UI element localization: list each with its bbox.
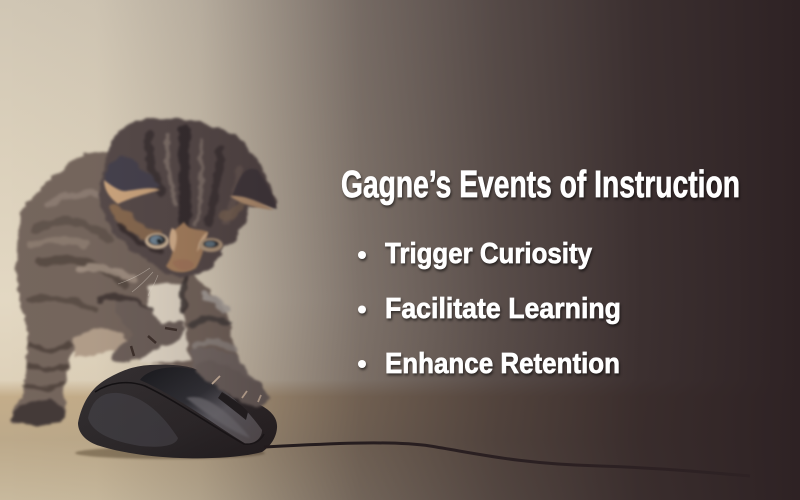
mouse textured grip	[88, 393, 178, 447]
kitten front right leg	[190, 348, 266, 405]
kitten nose	[172, 259, 194, 270]
kitten head fur stripes	[116, 130, 244, 252]
bullet item: Trigger Curiosity: Trigger Curiosity	[385, 238, 592, 270]
kitten left eye	[145, 233, 169, 249]
computer mouse	[75, 365, 277, 459]
kitten right eye	[199, 238, 223, 252]
mouse edge line	[95, 383, 264, 444]
kitten head	[100, 119, 277, 276]
kitten right ear inner	[230, 196, 274, 210]
bullet item: Facilitate Learning: Facilitate Learning	[385, 293, 621, 325]
kitten rear paw	[11, 400, 64, 425]
kitten white chest	[140, 282, 190, 362]
bullet item: Enhance Retention: Enhance Retention	[385, 348, 620, 380]
kitten whiskers	[118, 268, 158, 296]
kitten	[11, 119, 277, 425]
right paw over mouse	[194, 361, 270, 407]
kitten body	[12, 151, 266, 424]
mouse shiny highlight	[186, 397, 250, 438]
bullet list	[358, 238, 621, 380]
kitten right ear	[232, 169, 277, 209]
kitten left paw toes	[131, 328, 177, 356]
mouse glossy top button	[140, 367, 262, 444]
right paw	[194, 361, 270, 407]
photo background: carpet floor	[0, 380, 800, 500]
kitten left ear	[104, 156, 160, 202]
kitten belly tan	[72, 329, 128, 356]
kitten front left leg	[112, 300, 184, 362]
kitten face muzzle	[166, 222, 208, 272]
right paw claws	[212, 376, 261, 402]
mouse scroll wheel	[218, 392, 248, 420]
mouse shadow	[75, 447, 265, 459]
mouse cable	[264, 443, 750, 476]
kitten nose bridge	[169, 228, 208, 252]
mouse body	[78, 365, 277, 458]
kitten fur group	[11, 119, 277, 425]
kitten body markings	[26, 193, 232, 389]
kitten left ear inner	[104, 180, 160, 204]
